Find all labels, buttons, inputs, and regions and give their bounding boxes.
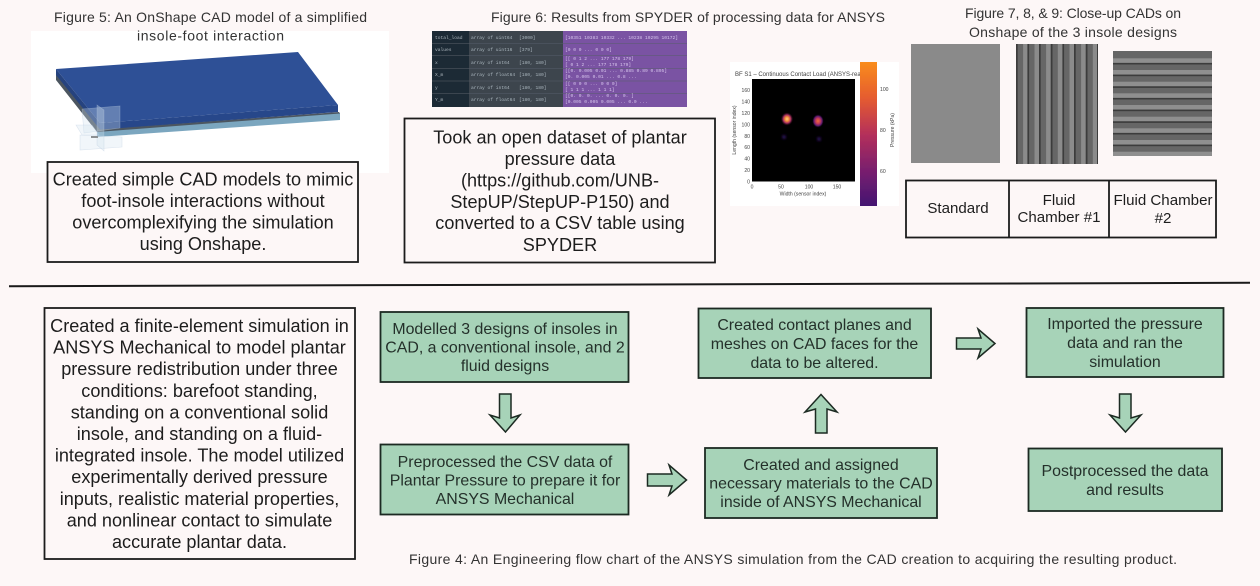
icon: origin planes <box>76 105 122 151</box>
chart: plantar pressure heatmap: 40 <box>744 156 750 162</box>
flow step: import pressure data and run: Imported the pressure <box>1047 316 1203 333</box>
text block: simulation summary: Created a finite-element simulation in <box>50 316 349 336</box>
panel: SPYDER variable table: [[0. 0. 0. ... 0. 0. 0. ] <box>565 93 634 99</box>
panel: SPYDER variable table: array of uint64 <box>471 35 513 41</box>
icon: lower insole layer <box>97 113 340 137</box>
arrow: step 1 to step 2 <box>490 394 520 432</box>
flow step: postprocess results: and results <box>1086 482 1164 499</box>
arrow: step 3 to step 4 <box>805 394 837 433</box>
panel: SPYDER variable table: [[ 0 1 2 ... 177 178 179] <box>565 56 634 62</box>
panel: SPYDER variable table: [180, 180] <box>519 97 547 103</box>
flow step: postprocess results <box>1028 448 1222 511</box>
text block: dataset description <box>404 118 715 262</box>
panel: SPYDER variable table: [379] <box>519 47 533 53</box>
chart: plantar pressure heatmap: 50 <box>778 184 784 190</box>
table: insole design labels <box>906 180 1216 238</box>
panel: SPYDER variable table: [180, 180] <box>519 60 547 66</box>
arrow: step 2 to step 3 <box>648 465 686 495</box>
panel: figure 5 CAD model <box>31 31 389 173</box>
text block: dataset description: StepUP/StepUP-P150) and <box>450 192 670 212</box>
arrow: step 5 to step 6 <box>1110 394 1141 432</box>
flow step: assign materials: inside of ANSYS Mechanical <box>720 494 922 511</box>
chart: plantar pressure heatmap: BF S1 – Continuous Contact Load (ANSYS-ready) <box>735 72 869 78</box>
heading: figures 7 8 9 caption: Onshape of the 3 insole designs <box>969 24 1177 40</box>
text block: dataset description: converted to a CSV table using <box>435 213 685 233</box>
text block: simulation summary: insole, and standing on a fluid- <box>77 424 322 444</box>
chart: plantar pressure heatmap: 120 <box>742 111 750 117</box>
icon: blue insole left edge <box>56 69 100 130</box>
panel: SPYDER variable table: [0 0 0 ... 0 0 0] <box>565 47 612 53</box>
panel: SPYDER variable table: array of float64 <box>471 97 515 103</box>
text block: simulation summary: ANSYS Mechanical to model plantar <box>53 338 346 358</box>
table: insole design labels: Standard <box>927 200 989 217</box>
text block: simulation summary: integrated insole. The model utilized <box>55 446 344 466</box>
panel: SPYDER variable table: [180, 180] <box>519 85 547 91</box>
panel: SPYDER variable table: values <box>435 47 452 53</box>
flow step: contact planes and meshes: Created contact planes and <box>717 317 912 334</box>
text block: CAD description: Created simple CAD models to mimic <box>53 170 353 190</box>
flow step: preprocess CSV data <box>380 444 628 514</box>
panel: SPYDER variable table: [[0. 0.005 0.01 ... 0.885 0.89 0.895] <box>565 68 667 74</box>
flow step: preprocess CSV data: ANSYS Mechanical <box>436 491 574 508</box>
chart: plantar pressure heatmap: 60 <box>744 145 750 151</box>
panel: SPYDER variable table: array of int64 <box>471 85 510 91</box>
chart: plantar pressure heatmap: 20 <box>744 168 750 174</box>
text block: CAD description <box>48 162 358 262</box>
chart: plantar pressure heatmap: 140 <box>742 100 750 106</box>
chart: plantar pressure heatmap: Length (sensor index) <box>732 105 738 155</box>
flow step: assign materials: necessary materials to the CAD <box>709 476 933 492</box>
panel: SPYDER variable table: [0. 0.005 0.01 ... 0.8 ... <box>565 74 637 80</box>
chart: plantar pressure heatmap: Width (sensor index) <box>780 192 827 198</box>
divider <box>9 283 1250 286</box>
text block: simulation summary: inputs, realistic material properties, <box>60 489 339 509</box>
chart: plantar pressure heatmap: 60 <box>880 169 886 175</box>
table: insole design labels: Fluid Chamber <box>1114 192 1212 209</box>
panel: SPYDER variable table: Y_m <box>435 97 444 103</box>
figure: fluid chamber 1 CAD <box>1016 44 1098 164</box>
chart: plantar pressure heatmap <box>730 62 899 206</box>
panel: SPYDER variable table: [180, 180] <box>519 72 547 78</box>
flow step: contact planes and meshes: data to be altered. <box>750 355 879 372</box>
icon: blue insole front edge <box>100 105 338 130</box>
text block: simulation summary: and nonlinear contact to simulate <box>67 510 332 530</box>
flow step: import pressure data and run: data and ran the <box>1067 335 1183 352</box>
figure: standard insole CAD <box>911 44 1000 163</box>
flow step: assign materials <box>705 448 937 518</box>
panel: SPYDER variable table: array of float64 <box>471 72 515 78</box>
panel: SPYDER variable table: array of int64 <box>471 60 510 66</box>
panel: SPYDER variable table: [3000] <box>519 35 536 41</box>
text block: CAD description: overcomplexifying the simulation <box>72 212 334 232</box>
caption: figure 4: Figure 4: An Engineering flow chart of the ANSYS simulation from the CAD creation to acquiring the resulting product. <box>409 551 1177 567</box>
text block: dataset description: SPYDER <box>523 235 597 255</box>
flow step: contact planes and meshes <box>698 308 931 378</box>
panel: SPYDER variable table <box>432 31 687 107</box>
chart: plantar pressure heatmap: 80 <box>744 134 750 140</box>
panel: SPYDER variable table: X_m <box>435 72 444 78</box>
chart: plantar pressure heatmap: 100 <box>880 87 889 93</box>
chart: plantar pressure heatmap: 0 <box>747 180 750 186</box>
panel: SPYDER variable table: total_load <box>435 35 463 41</box>
text block: dataset description: (https://github.com/UNB- <box>461 170 659 190</box>
heading: figure 6 caption: Figure 6: Results from SPYDER of processing data for ANSYS <box>491 9 885 25</box>
text block: dataset description: Took an open dataset of plantar <box>433 128 687 148</box>
text block: dataset description: pressure data <box>505 149 616 169</box>
flow step: model insole designs: Modelled 3 designs of insoles in <box>392 321 618 338</box>
chart: plantar pressure heatmap: 100 <box>742 122 750 128</box>
chart: plantar pressure heatmap: 100 <box>805 184 813 190</box>
text block: simulation summary: conditions: barefoot standing, <box>81 381 318 401</box>
flow step: preprocess CSV data: Plantar Pressure to prepare it for <box>390 472 621 490</box>
panel: SPYDER variable table: y <box>435 86 438 91</box>
chart: plantar pressure heatmap: Pressure (kPa) <box>890 113 896 147</box>
flow step: contact planes and meshes: meshes on CAD faces for the <box>711 336 918 353</box>
text block: simulation summary <box>44 308 355 559</box>
icon: dark middle layer <box>56 74 340 132</box>
panel: SPYDER variable table: array of uint16 <box>471 47 513 53</box>
flow step: postprocess results: Postprocessed the data <box>1042 463 1209 480</box>
table: insole design labels: Chamber #1 <box>1017 209 1101 226</box>
flow step: assign materials: Created and assigned <box>743 457 899 474</box>
text block: CAD description: using Onshape. <box>140 234 266 254</box>
panel: SPYDER variable table: [0.005 0.005 0.005 ... 0.0 ... <box>565 99 648 105</box>
heading: figure 5 caption: insole-foot interaction <box>137 28 284 44</box>
icon: blue insole top face <box>56 52 338 123</box>
text block: simulation summary: accurate plantar data. <box>112 532 287 552</box>
flow step: import pressure data and run <box>1026 308 1224 377</box>
chart: plantar pressure heatmap: 0 <box>751 184 754 190</box>
panel: SPYDER variable table: [10351 10383 10332 ... 10238 10295 10172] <box>565 35 678 41</box>
figure: fluid chamber 2 CAD <box>1113 51 1212 156</box>
flow step: model insole designs: CAD, a conventional insole, and 2 <box>385 340 625 356</box>
chart: plantar pressure heatmap: 150 <box>833 184 841 190</box>
text block: simulation summary: pressure redistribution under three <box>61 359 338 379</box>
heading: figures 7 8 9 caption: Figure 7, 8, & 9: Close-up CADs on <box>965 5 1181 21</box>
text block: CAD description: foot-insole interactions without <box>81 191 325 211</box>
chart: plantar pressure heatmap: 80 <box>880 128 886 134</box>
text block: simulation summary: experimentally derived pressure <box>71 467 328 487</box>
flow step: model insole designs <box>380 312 628 382</box>
panel: SPYDER variable table: [ 0 1 2 ... 177 178 179] <box>565 62 631 68</box>
panel: SPYDER variable table: x <box>435 61 438 66</box>
table: insole design labels: Fluid <box>1043 192 1075 209</box>
panel: SPYDER variable table: [[ 0 0 0 ... 0 0 0] <box>565 81 617 87</box>
arrow: step 4 to step 5 <box>956 329 995 358</box>
text block: simulation summary: standing on a conventional solid <box>71 402 328 422</box>
flow step: import pressure data and run: simulation <box>1089 354 1161 371</box>
flow step: model insole designs: fluid designs <box>461 358 549 375</box>
heading: figure 5 caption: Figure 5: An OnShape CAD model of a simplified <box>54 9 367 25</box>
chart: plantar pressure heatmap: 160 <box>742 88 750 94</box>
flow step: preprocess CSV data: Preprocessed the CSV data of <box>398 454 613 471</box>
panel: SPYDER variable table: [ 1 1 1 ... 1 1 1] <box>565 87 615 93</box>
table: insole design labels: #2 <box>1155 210 1171 227</box>
